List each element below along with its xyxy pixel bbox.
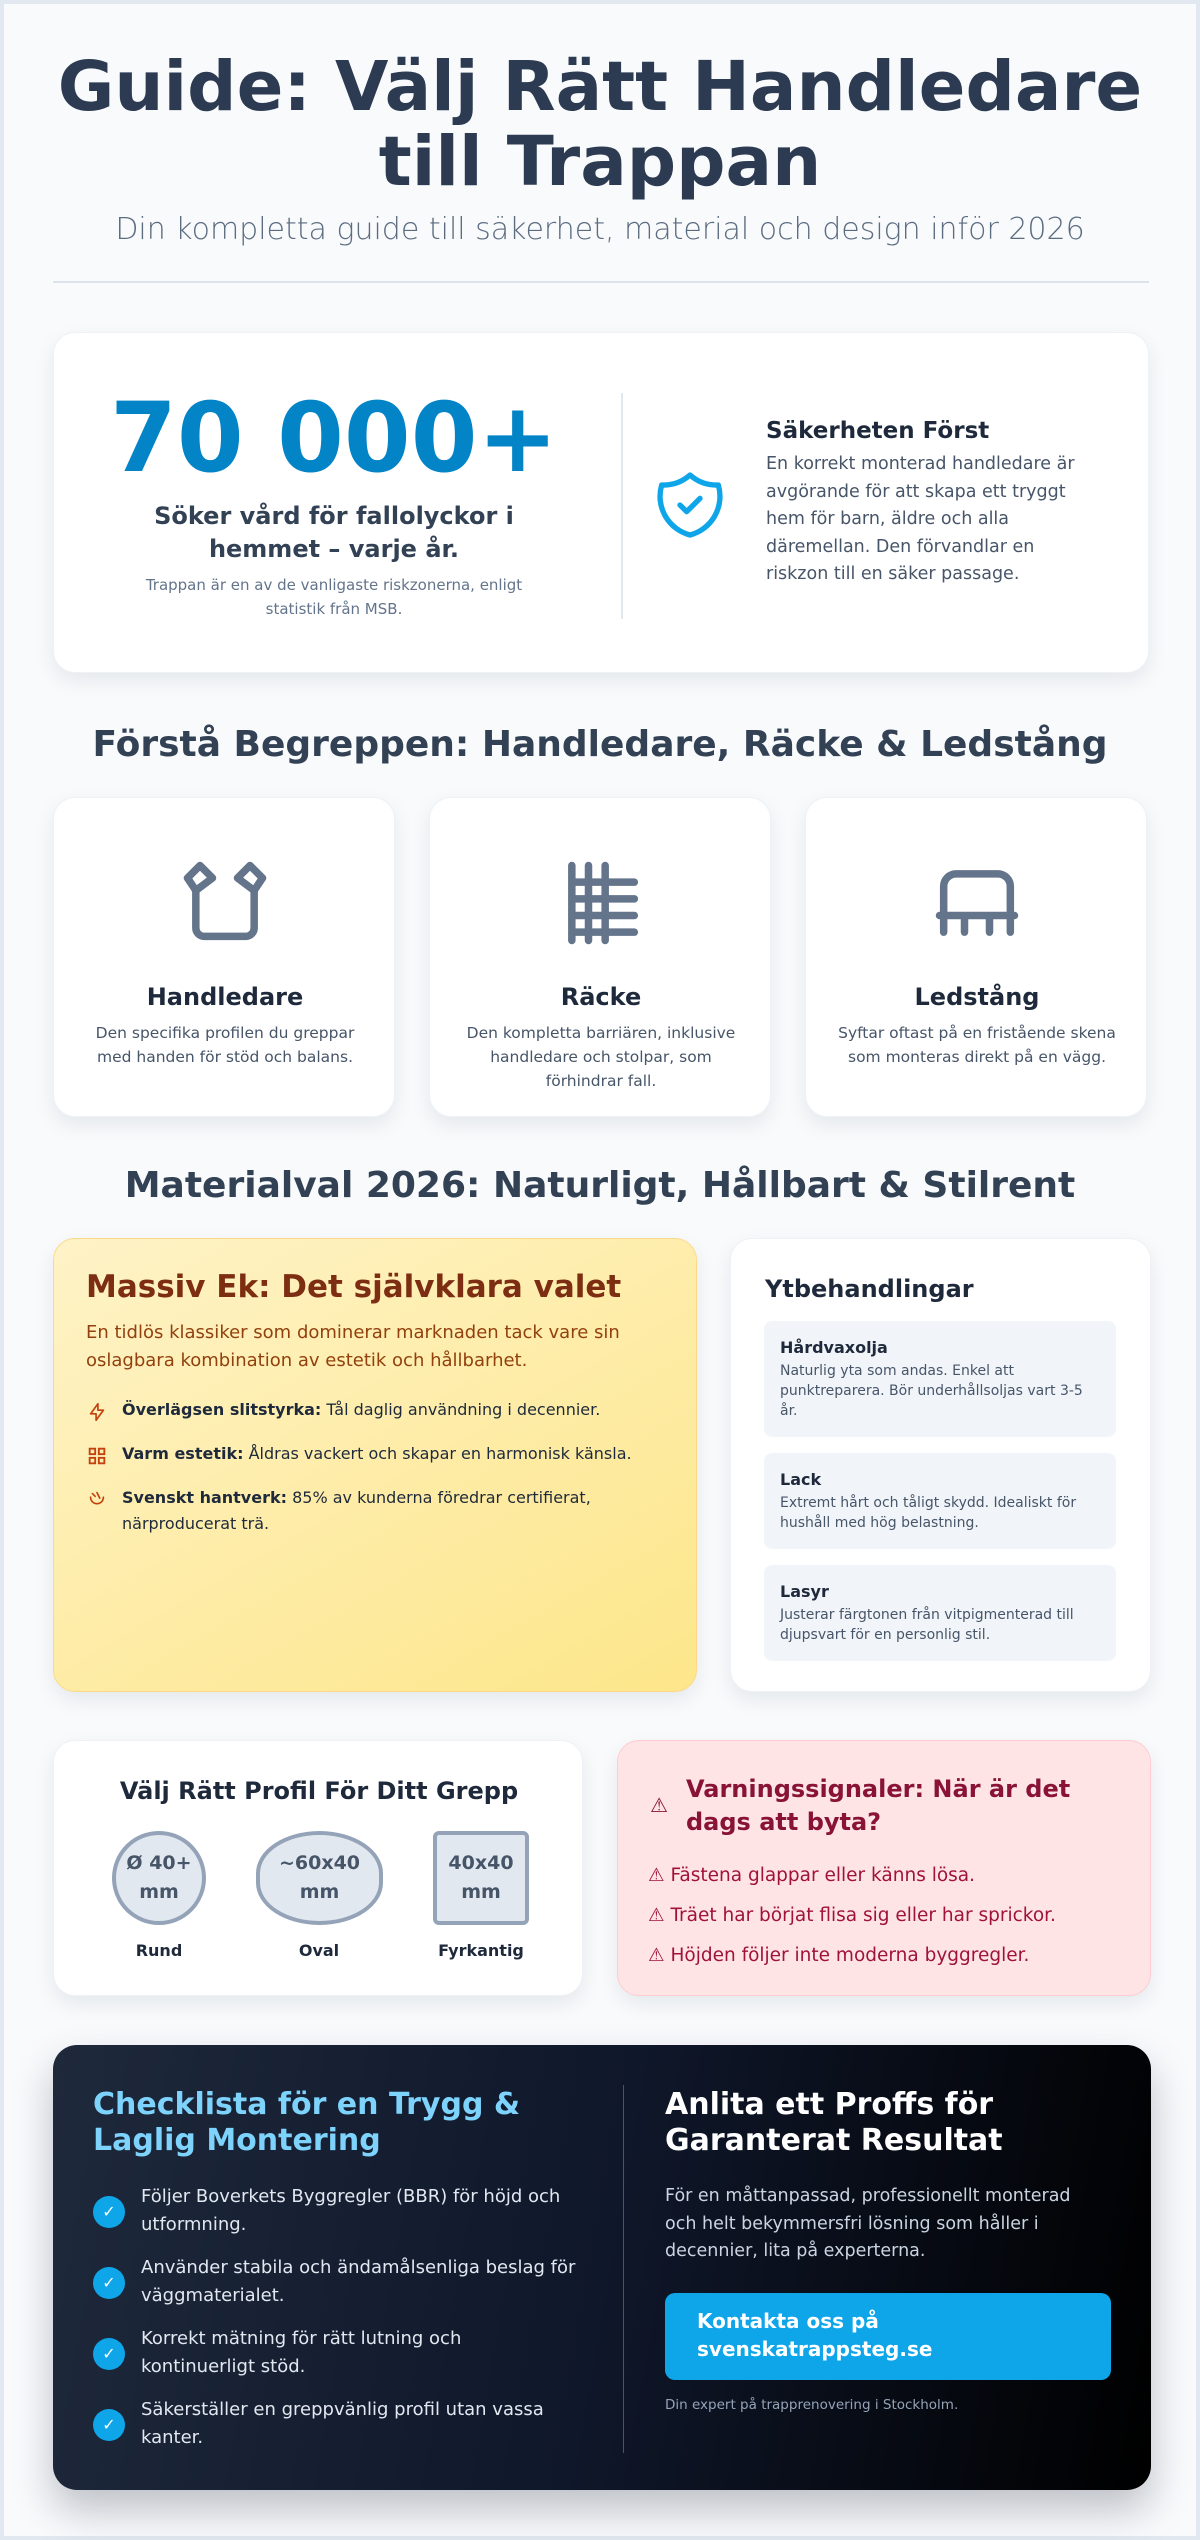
shape: rund xyxy=(112,1831,206,1925)
safety text: En korrekt monterad handledare är avgörande för att skapa ett tryggt hem för barn, äldre och alla däremellan. Den förvandlar en riskzon till en säker passage. xyxy=(766,454,1075,584)
panel: profil: Rund xyxy=(136,1941,182,1960)
panel: racke: Den kompletta barriären, inklusive handledare och stolpar, som förhindrar fall. xyxy=(467,1024,735,1090)
panel: profil: Fyrkantig xyxy=(438,1941,524,1960)
subtitle: Din kompletta guide till säkerhet, material och design inför 2026 xyxy=(115,212,1085,247)
box: hardvaxolja: Hårdvaxolja xyxy=(780,1338,888,1357)
list: warnings xyxy=(648,1865,1056,1966)
box: lasyr: Lasyr xyxy=(780,1582,829,1601)
panel: profil: Välj Rätt Profil För Ditt Grepp xyxy=(120,1777,518,1805)
checklist: ✓ xyxy=(102,2273,116,2292)
panel: profil: Oval xyxy=(299,1941,339,1960)
panel: massiv ek xyxy=(53,1238,697,1692)
checklist: Använder stabila och ändamålsenliga beslag för väggmaterialet. xyxy=(141,2257,575,2306)
checklist: ✓ xyxy=(102,2344,116,2363)
list: warnings: ⚠ Fästena glappar eller känns lösa. xyxy=(648,1865,975,1886)
panel: ytbehandlingar xyxy=(730,1238,1151,1692)
big number: 70 000+ xyxy=(110,382,558,494)
panel: ledstang: Ledstång xyxy=(915,983,1039,1011)
button: svenskatrappsteg.se xyxy=(697,2337,932,2361)
checklist: Följer Boverkets Byggregler (BBR) för höjd och utformning. xyxy=(141,2186,560,2234)
heading: begrepp: Förstå Begreppen: Handledare, Räcke & Ledstång xyxy=(92,724,1108,765)
shape: fyrkantig: 40x40 xyxy=(448,1852,514,1874)
CTA heading: Anlita ett Proffs för Garanterat Resultat xyxy=(665,2087,1003,2158)
panel: checklist & CTA xyxy=(53,2045,1151,2490)
icon: wall rail xyxy=(936,870,1018,936)
icon: warning: ⚠ xyxy=(650,1793,668,1817)
panel: handledare xyxy=(53,797,395,1117)
list: warnings: ⚠ Höjden följer inte moderna byggregler. xyxy=(648,1945,1029,1966)
panel: racke: Räcke xyxy=(561,983,641,1011)
box: lack: Extremt hårt och tåligt skydd. Idealiskt för hushåll med hög belastning. xyxy=(780,1495,1076,1531)
panel: statistics xyxy=(53,332,1149,673)
box: lack: Lack xyxy=(780,1470,821,1489)
checklist xyxy=(93,2186,576,2448)
footnote: Din expert på trapprenovering i Stockholm. xyxy=(665,2397,958,2413)
icon: handrail box xyxy=(184,862,266,940)
panel: varningssignaler: Varningssignaler: När är det dags att byta? xyxy=(686,1775,1070,1836)
panel: massiv ek: Massiv Ek: Det självklara valet xyxy=(86,1269,621,1305)
shape: rund: mm xyxy=(139,1881,179,1903)
list: warnings: ⚠ Träet har börjat flisa sig eller har sprickor. xyxy=(648,1905,1056,1926)
checklist: Säkerställer en greppvänlig profil utan vassa kanter. xyxy=(141,2399,544,2448)
button: Kontakta oss på xyxy=(697,2309,879,2333)
item: slitstyrka: Överlägsen slitstyrka: Tål daglig användning i decennier. xyxy=(122,1400,600,1419)
box: hardvaxolja xyxy=(764,1321,1116,1437)
box: lasyr xyxy=(764,1565,1116,1661)
panel: massiv ek: En tidlös klassiker som dominerar marknaden tack vare sin oslagbara kombination av estetik och hållbarhet. xyxy=(86,1322,620,1371)
heading: material: Materialval 2026: Naturligt, Hållbart & Stilrent xyxy=(125,1165,1075,1206)
box: lasyr: Justerar färgtonen från vitpigmenterad till djupsvart för en personlig stil. xyxy=(780,1607,1074,1643)
panel: racke xyxy=(429,797,771,1117)
panel: profil xyxy=(53,1740,583,1996)
panel: ledstang xyxy=(805,797,1147,1117)
panel: handledare: Handledare xyxy=(147,983,303,1011)
shape: oval xyxy=(256,1831,383,1925)
shape: fyrkantig xyxy=(433,1831,529,1925)
title xyxy=(58,47,1142,202)
icon: shield xyxy=(657,472,723,538)
checklist: Korrekt mätning för rätt lutning och kontinuerligt stöd. xyxy=(141,2328,461,2376)
panel: ledstang: Syftar oftast på en fristående skena som monteras direkt på en vägg. xyxy=(838,1024,1116,1066)
checklist heading: Checklista för en Trygg & Laglig Montering xyxy=(93,2087,520,2158)
item: estetik: Varm estetik: Åldras vackert och skapar en harmonisk känsla. xyxy=(122,1444,632,1463)
shape: oval: ~60x40 xyxy=(279,1852,360,1874)
stat caption: Söker vård för fallolyckor i hemmet – varje år. xyxy=(154,502,514,563)
checklist: ✓ xyxy=(102,2202,116,2221)
button xyxy=(665,2293,1111,2380)
checklist: ✓ xyxy=(102,2415,116,2434)
box: hardvaxolja: Naturlig yta som andas. Enkel att punktreparera. Bör underhållsoljas vart 3-5 år. xyxy=(780,1363,1083,1419)
CTA text: För en måttanpassad, professionellt monterad och helt bekymmersfri lösning som håller i decennier, lita på experterna. xyxy=(665,2186,1071,2261)
shape: oval: mm xyxy=(300,1881,339,1903)
shape: fyrkantig: mm xyxy=(461,1881,501,1903)
title: Guide: Välj Rätt Handledare xyxy=(58,47,1142,127)
icon: grid railing xyxy=(568,862,638,944)
stat source: Trappan är en av de vanligaste riskzonerna, enligt statistik från MSB. xyxy=(146,576,522,618)
shape: rund: Ø 40+ xyxy=(126,1852,192,1874)
panel: varningssignaler xyxy=(617,1740,1151,1996)
safety text: Säkerheten Först xyxy=(766,418,989,444)
panel: ytbehandlingar: Ytbehandlingar xyxy=(765,1275,974,1303)
item: hantverk: Svenskt hantverk: 85% av kunderna föredrar certifierat, närproducerat trä. xyxy=(122,1488,591,1533)
list: oak benefits xyxy=(88,1400,632,1533)
panel: handledare: Den specifika profilen du greppar med handen för stöd och balans. xyxy=(96,1024,354,1066)
box: lack xyxy=(764,1453,1116,1549)
title: till Trappan xyxy=(379,122,821,202)
